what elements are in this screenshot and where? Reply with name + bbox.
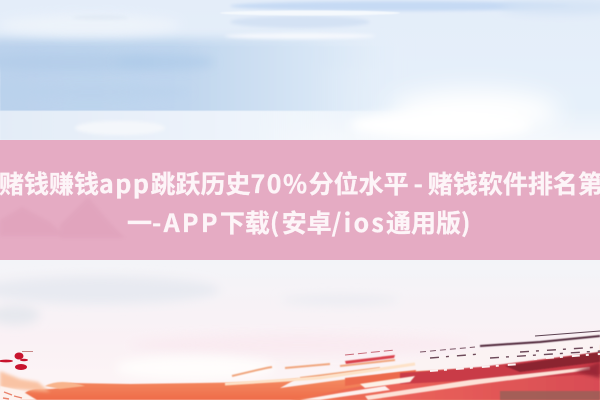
pale scratches [365,367,590,400]
lower sky haze [0,276,470,380]
dark ink lines [480,336,600,346]
left side orange wash and speckle [0,371,50,392]
dark red lower right [500,391,600,400]
orange base [20,345,600,400]
title line 2: 一-APP下载(安卓/ios通用版) [127,204,473,240]
pale orange strokes [232,360,395,378]
white speckle dashes over the red [430,354,600,371]
red splatter [0,351,33,370]
faint mountains [0,140,600,260]
white textured area over the right of the stroke [280,332,600,388]
sunset brush stroke [0,331,600,400]
red and orange streaks [345,370,416,386]
upper sky clouds [0,0,600,140]
pink title band [0,140,600,260]
title line 1: 赌钱赚钱app跳跃历史70%分位水平-赌钱软件排名第 [0,165,600,201]
